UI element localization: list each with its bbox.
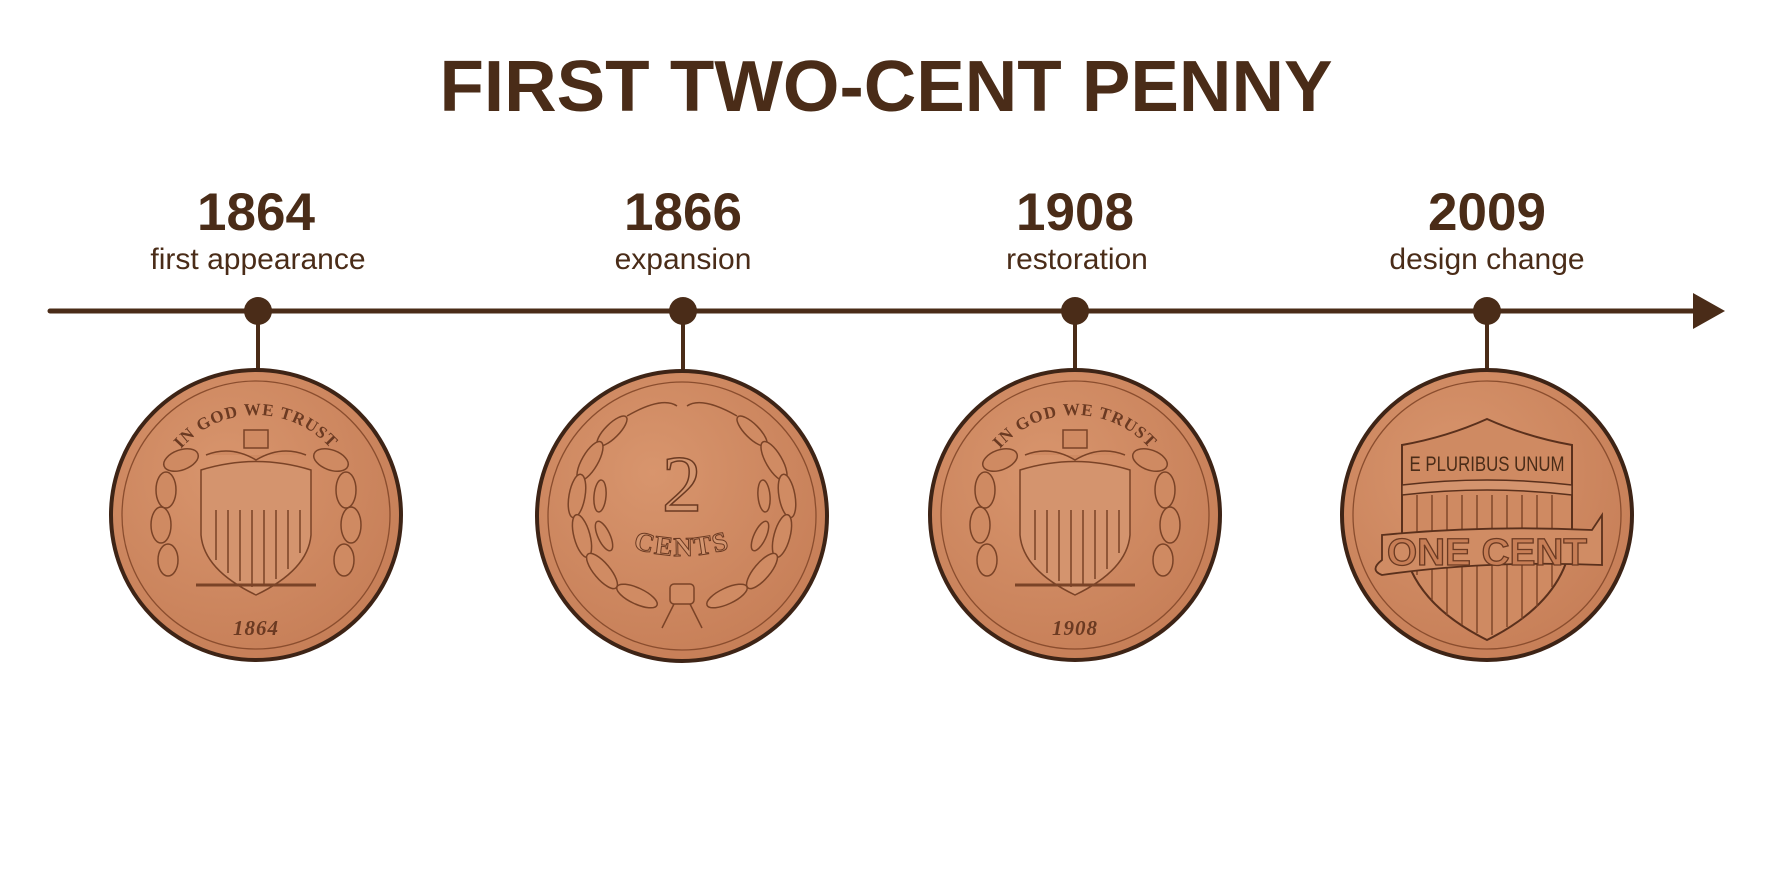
timeline arrow: [50, 293, 1725, 329]
milestone 1864: 1864: [197, 183, 315, 242]
coin: 1908 shield: IN GOD WE TRUST: [992, 404, 1158, 448]
coin: 2009 union shield: ONE CENT: [1387, 532, 1587, 574]
milestone 1866: expansion: [615, 243, 751, 276]
coin: 2009 union shield: E PLURIBUS UNUM: [1410, 453, 1564, 476]
coin: 1866 two cents wreath: [535, 369, 829, 663]
coin: 1864 shield: IN GOD WE TRUST: [173, 404, 338, 448]
coin: 1864 shield: [109, 368, 403, 662]
coin: 2009 union shield: [1342, 370, 1632, 660]
coin: 1866 two cents wreath: 2: [662, 441, 702, 529]
milestone 2009: [1389, 183, 1585, 370]
milestone 1866: 1866: [624, 183, 742, 242]
coin: 1864 shield: 1864: [233, 616, 279, 640]
milestone 2009: 2009: [1428, 183, 1546, 242]
coin: 1908 shield: [928, 368, 1222, 662]
milestone 1908: restoration: [1006, 243, 1148, 276]
milestone 1908: 1908: [1016, 183, 1134, 242]
coin: 1866 two cents wreath: CENTS: [635, 532, 728, 557]
coin: 1908 shield: 1908: [1052, 616, 1098, 640]
milestone 1908: [1006, 183, 1148, 370]
milestone 2009: design change: [1389, 243, 1585, 276]
title: FIRST TWO-CENT PENNY: [440, 47, 1332, 127]
milestone 1866: [615, 183, 751, 370]
milestone 1864: [150, 183, 366, 370]
milestone 1864: first appearance: [150, 243, 366, 276]
